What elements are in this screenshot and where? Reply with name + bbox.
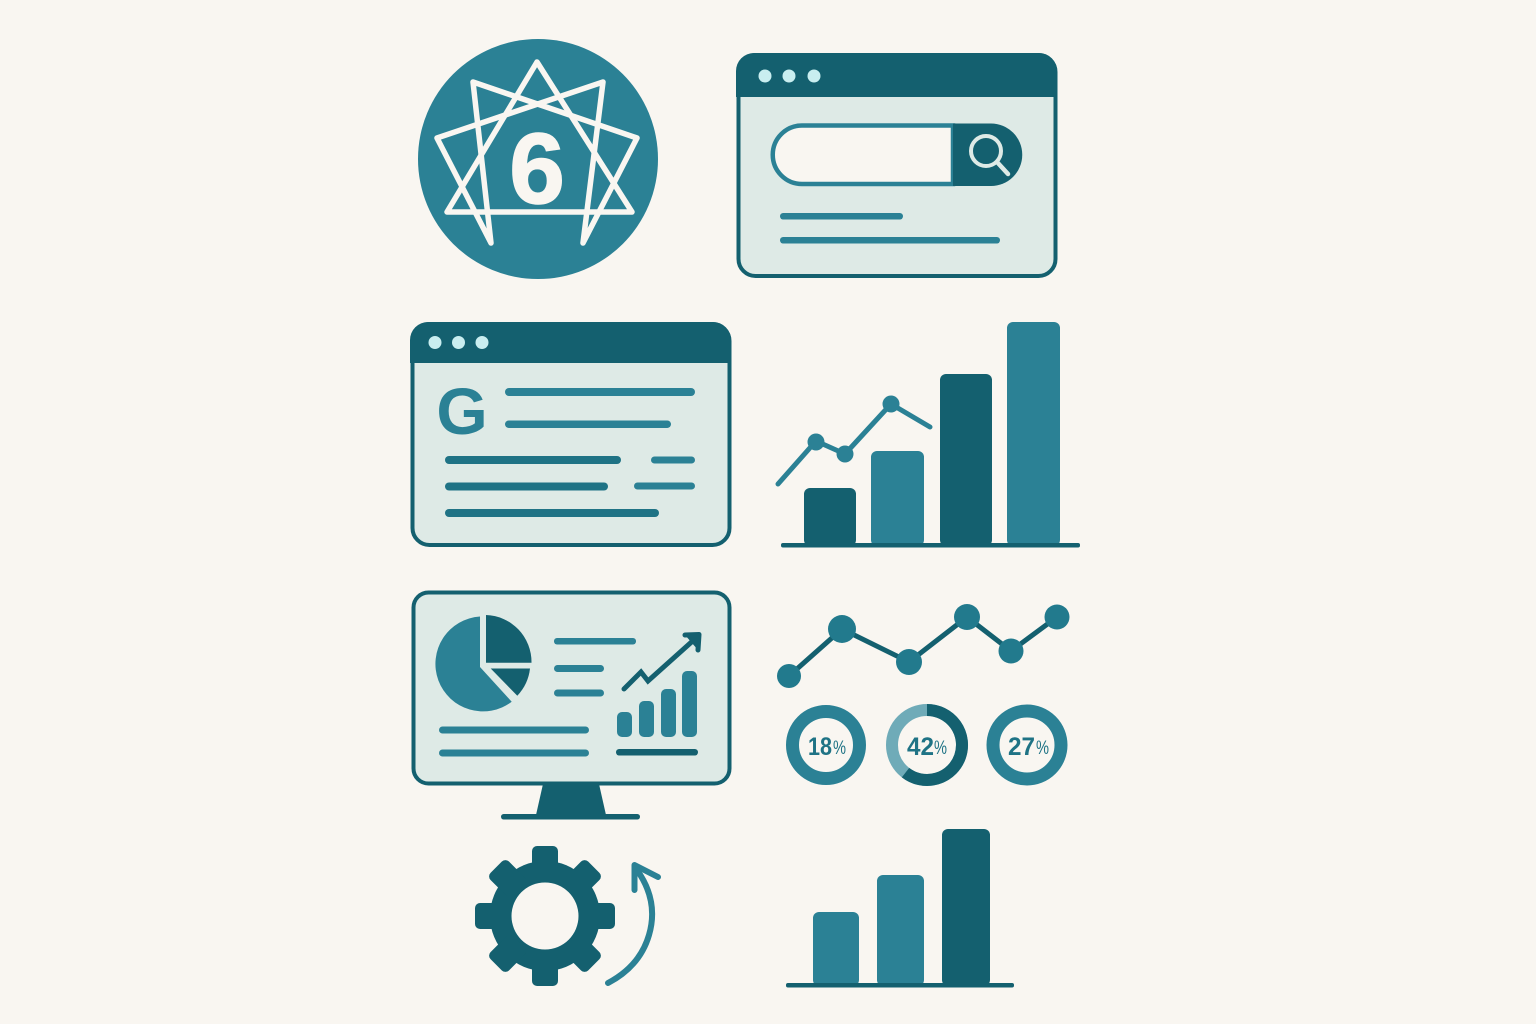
donut: 27 percent: 27 (1008, 733, 1035, 761)
icon: enneagram type 6 badge (418, 39, 658, 279)
panel: search results browser window (410, 322, 731, 545)
pie chart (435, 615, 532, 711)
search bar (773, 124, 1022, 186)
trend line (778, 396, 930, 484)
chart: line with nodes (777, 604, 1070, 688)
donut: 42 percent (892, 710, 962, 780)
arrow: growth trend (624, 634, 699, 689)
chart: bars with trend line (778, 322, 1080, 548)
icon: G logo: G (436, 374, 488, 448)
donut: 18 percent: % (833, 738, 846, 759)
panel: analytics monitor (414, 592, 730, 820)
arrow: rotation (608, 865, 658, 983)
panel: search browser window (736, 53, 1057, 276)
donut: 27 percent (993, 711, 1061, 779)
donut: 42 percent: 42 (907, 733, 934, 761)
number 6: 6 (509, 113, 565, 225)
chart: three bars (786, 829, 1014, 988)
mini bar chart (617, 671, 697, 737)
donut: 18 percent: 18 (808, 733, 832, 761)
donut: 42 percent: % (934, 738, 947, 759)
icon: magnifier (971, 136, 1008, 174)
icon: gear (475, 846, 615, 986)
donut: 27 percent: % (1036, 738, 1049, 759)
donut: 18 percent (792, 712, 860, 778)
